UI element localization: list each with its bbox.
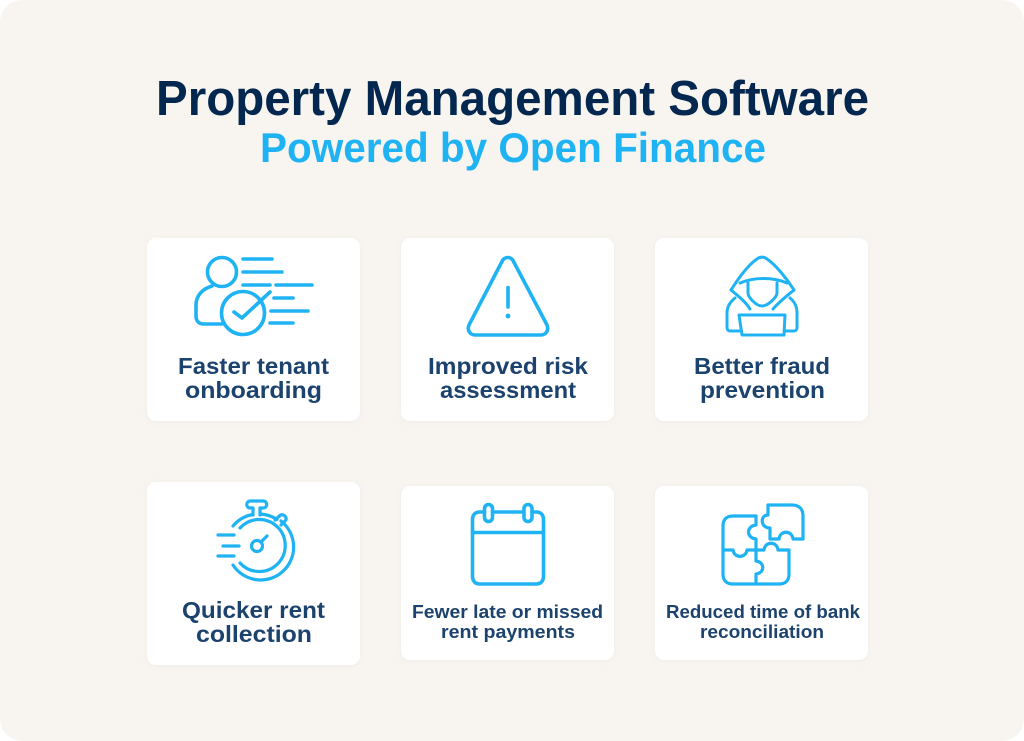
icon: warning triangle	[468, 258, 548, 335]
label: quicker rent collection: Quicker rent	[182, 597, 325, 623]
icon: user with check mark	[196, 258, 312, 334]
heading: subtitle: Powered by Open Finance	[260, 124, 766, 171]
icon: stopwatch	[218, 501, 294, 580]
label: reduced time of bank reconciliation: Reduced time of bank	[666, 601, 861, 622]
panel: fewer late or missed rent payments	[401, 486, 614, 660]
label: faster tenant onboarding: onboarding	[185, 377, 322, 403]
label: faster tenant onboarding: Faster tenant	[178, 353, 329, 379]
label: quicker rent collection: collection	[196, 621, 312, 647]
panel: better fraud prevention	[655, 238, 868, 421]
label: improved risk assessment: Improved risk	[428, 353, 588, 379]
icon: hooded hacker with laptop	[727, 257, 797, 335]
label: reduced time of bank reconciliation: reconciliation	[700, 621, 824, 642]
title	[156, 72, 869, 171]
icon: calendar	[472, 504, 544, 584]
label: better fraud prevention: Better fraud	[694, 353, 830, 379]
panel: quicker rent collection	[147, 482, 360, 665]
label: fewer late or missed rent payments: Fewer late or missed	[412, 601, 603, 622]
label: fewer late or missed rent payments: rent payments	[441, 621, 575, 642]
panel: faster tenant onboarding	[147, 238, 360, 421]
panel: reduced time of bank reconciliation	[655, 486, 868, 660]
heading: main title: Property Management Software	[156, 72, 869, 126]
icon: puzzle pieces	[723, 505, 803, 584]
label: better fraud prevention: prevention	[700, 377, 825, 403]
label: improved risk assessment: assessment	[440, 377, 576, 403]
panel: improved risk assessment	[401, 238, 614, 421]
